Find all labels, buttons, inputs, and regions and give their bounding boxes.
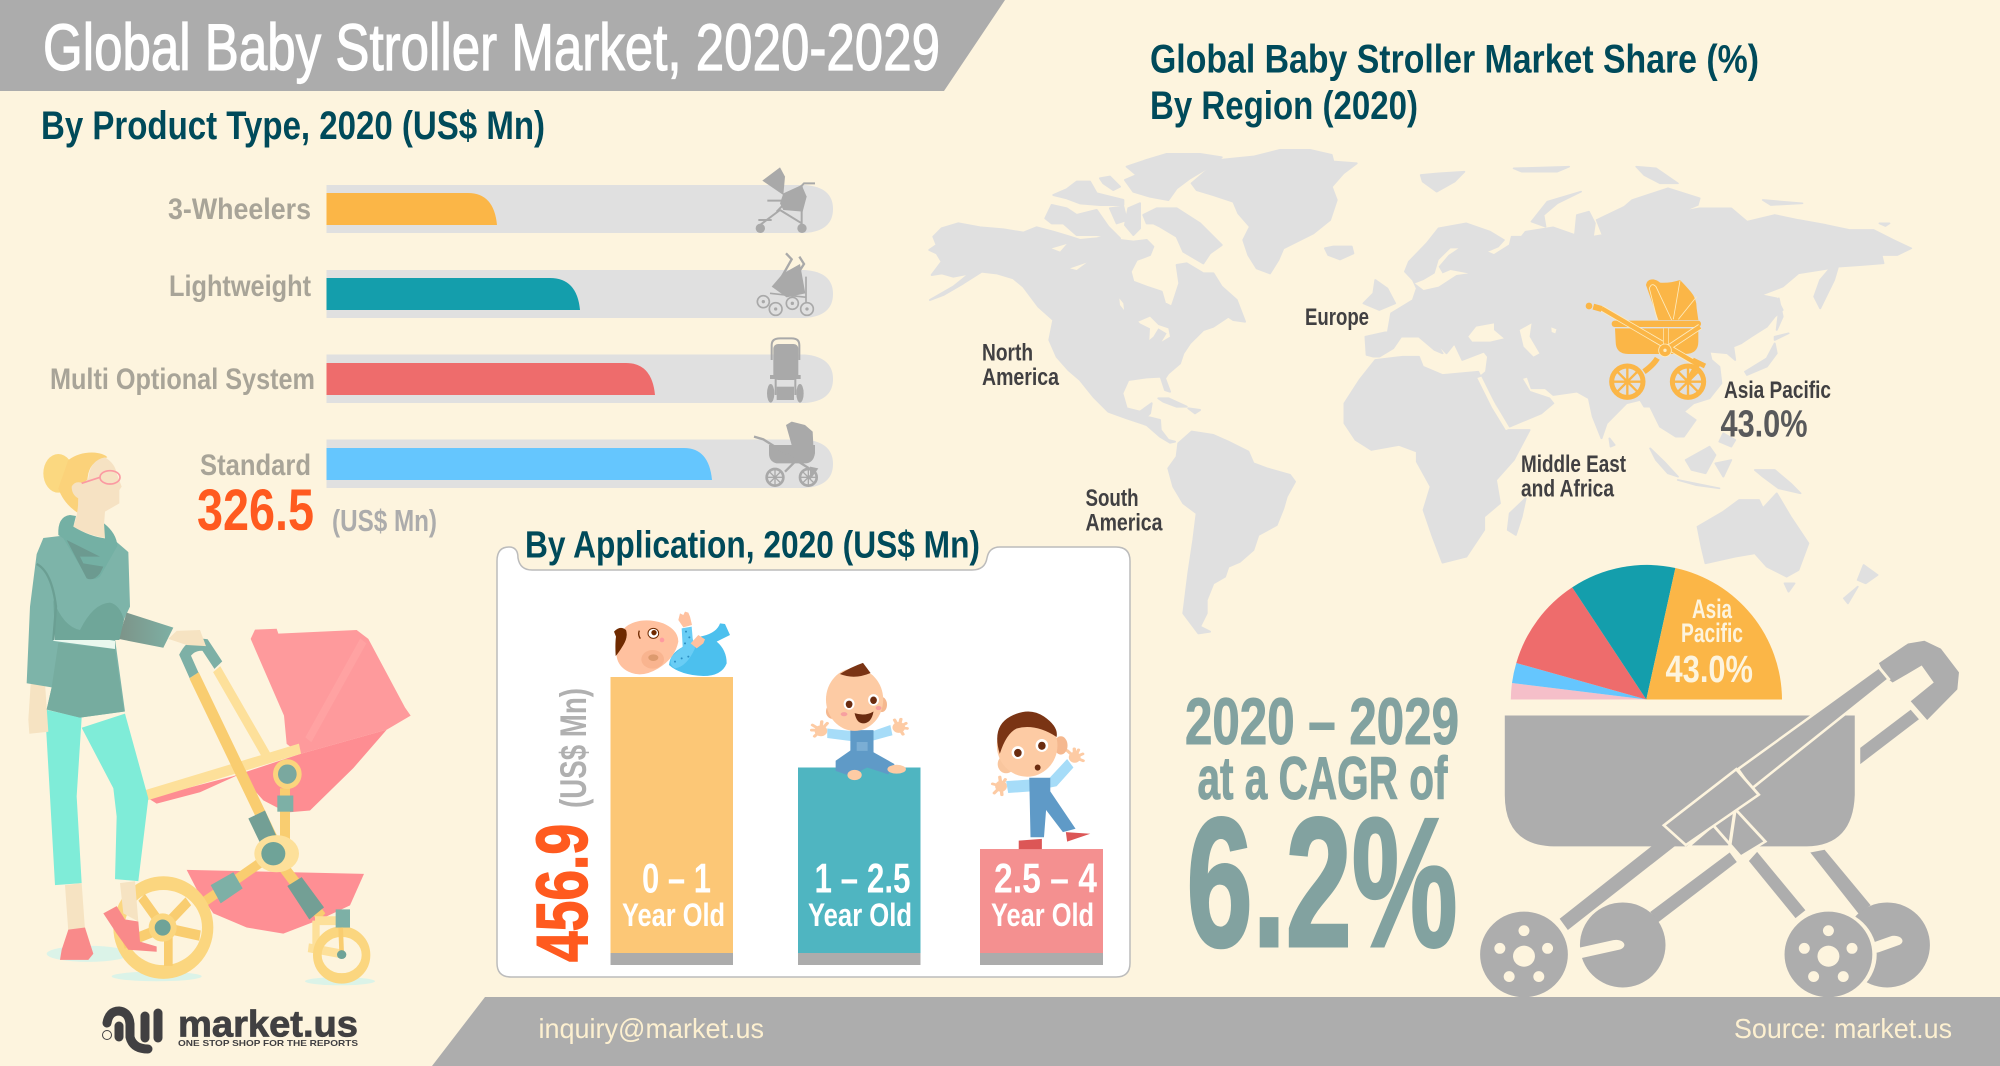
pie label (1666, 594, 1753, 691)
title: Global Baby Stroller Market, 2020-2029 (43, 10, 940, 84)
axles (1573, 941, 1894, 954)
icon: lightweight stroller (757, 253, 813, 315)
belt (53, 631, 115, 649)
map: Eurasia (1365, 188, 1911, 438)
hood (58, 515, 117, 579)
bar: 2.5-4 year: 2.5 – 4 (994, 854, 1098, 902)
shoes (60, 906, 157, 960)
bar: 1-2.5 year: 1 – 2.5 (814, 854, 910, 902)
bar: 2.5-4 year (980, 849, 1103, 965)
bar: 1-2.5 year (798, 768, 920, 965)
label: South America: South (1086, 485, 1138, 512)
map: Northern islands and Asia islands (1363, 167, 1889, 535)
map: lakes (1052, 244, 1170, 342)
pie chart (1511, 565, 1782, 700)
front wheel (308, 909, 366, 978)
lower bars (1560, 832, 1871, 930)
heading: by application: By Application, 2020 (US$ Mn) (525, 524, 980, 566)
logo icon (106, 1011, 158, 1049)
world map (929, 150, 1357, 633)
map heading (1150, 38, 1759, 128)
pie label: Pacific (1681, 618, 1743, 648)
front wheel right (1782, 910, 1875, 999)
woman lower body (27, 536, 206, 960)
ground shadows (47, 946, 375, 985)
bar: 0-1 year: Year Old (622, 897, 725, 933)
logo tagline: ONE STOP SHOP FOR THE REPORTS (178, 1038, 358, 1048)
bar: 3-Wheelers: 3-Wheelers (168, 193, 311, 226)
region labels: and Africa (1521, 476, 1615, 502)
map: Old World (1345, 167, 1911, 603)
pie label: 43.0% (1666, 649, 1753, 691)
icon: orange stroller on map (1586, 279, 1705, 397)
icon: multi option stroller (767, 338, 804, 403)
front wheel left (1478, 910, 1570, 999)
region labels: America (982, 364, 1060, 391)
illustration: baby lying (614, 612, 730, 676)
title band (0, 0, 1005, 91)
heading: by product type: By Product Type, 2020 (US$ Mn) (41, 104, 545, 148)
label: North America: North (982, 340, 1033, 366)
illustration: grey stroller (1478, 641, 1959, 999)
arm crease (37, 564, 56, 640)
hood fold (67, 540, 103, 579)
bar: 0-1 year: 0 – 1 (642, 854, 711, 902)
callout: CAGR: 2020 – 2029 (1185, 684, 1459, 758)
footer: email: inquiry@market.us (538, 1013, 764, 1044)
illustrations: babies sitting and standing (812, 663, 1090, 849)
value: 456.9 rotated: 456.9 (523, 824, 603, 962)
glasses (82, 471, 120, 484)
handle (1879, 641, 1959, 720)
value: 326.5: 326.5 (197, 478, 314, 543)
region labels: America (1086, 510, 1163, 536)
label: Asia Pacific: Asia Pacific (1724, 377, 1831, 404)
map: Red Sea (1479, 377, 1508, 429)
map: South America (1168, 432, 1295, 633)
logo: market.us (106, 1004, 358, 1049)
map: North America (929, 223, 1245, 443)
lower basket (187, 870, 364, 934)
handle lower arm (1860, 710, 1919, 764)
unit label: (US$ Mn) (332, 503, 437, 538)
callout: CAGR: 6.2% (1186, 779, 1458, 985)
bar: Standard (200, 440, 833, 488)
connector block (1664, 769, 1759, 845)
region labels (982, 304, 1831, 536)
sweater hem shade (47, 643, 124, 718)
baby standing (993, 711, 1090, 849)
stroller frame (147, 645, 322, 917)
callout: CAGR: at a CAGR of (1198, 745, 1448, 812)
right hand (168, 630, 206, 646)
left hand (28, 683, 48, 734)
label: Middle East and Africa: Middle East (1521, 451, 1626, 478)
map: inland seas (1415, 248, 1556, 357)
bar: Multi Optional System: Multi Optional System (50, 363, 315, 396)
footer band (432, 997, 2000, 1066)
map heading: Global Baby Stroller Market Share (%) (1150, 38, 1759, 82)
baby sitting (812, 663, 907, 780)
bar: Lightweight: Lightweight (169, 270, 311, 303)
map: Africa (1345, 357, 1530, 563)
bar: 0-1 year (610, 677, 733, 965)
map: Greenland (1192, 150, 1357, 273)
icon: three wheeler (756, 167, 815, 233)
canopy stripe (308, 641, 363, 740)
map: Australia and New Zealand (1698, 493, 1878, 603)
bun (43, 454, 73, 493)
face and neck (72, 457, 122, 538)
illustration: mother with stroller (27, 536, 411, 985)
icons: small strollers (754, 167, 818, 486)
unit label rotated: (US$ Mn) (553, 688, 594, 808)
panel: by application (497, 547, 1130, 977)
logo wordmark: market.us (178, 1004, 358, 1044)
pie label: Asia (1692, 594, 1733, 624)
footer: source: Source: market.us (1734, 1013, 1952, 1044)
callout: CAGR (1185, 684, 1459, 985)
main bar (1738, 667, 1889, 789)
main joint (211, 835, 324, 919)
bar: Standard: Standard (200, 449, 311, 482)
waist shade (53, 600, 124, 640)
basket (1505, 716, 1855, 846)
bar: Lightweight (169, 270, 833, 318)
bar: 2.5-4 year: Year Old (991, 897, 1094, 933)
stroller canopy (251, 629, 411, 754)
trousers (45, 710, 148, 885)
legs (65, 881, 138, 932)
bar: 3-Wheelers (168, 185, 833, 233)
rear wheels (1580, 902, 1930, 987)
sweater (27, 536, 130, 718)
hair (58, 453, 107, 513)
bar: 1-2.5 year: Year Old (808, 897, 912, 933)
bar chart: product type (50, 185, 833, 488)
value: Asia Pacific share: 43.0% (1720, 404, 1808, 446)
connector (1689, 809, 1765, 857)
label: Europe: Europe (1305, 304, 1369, 331)
upper joint (248, 759, 302, 843)
stroller seat (148, 730, 387, 812)
rear wheel (119, 883, 208, 972)
bar: Multi Optional System (50, 354, 833, 403)
map: Arctic islands (1045, 154, 1222, 263)
map heading: By Region (2020) (1150, 84, 1418, 128)
map: Iceland and Caribbean (1158, 247, 1353, 413)
sleeve (118, 613, 173, 648)
woman upper body (37, 453, 124, 640)
icon: standard stroller (754, 422, 818, 486)
